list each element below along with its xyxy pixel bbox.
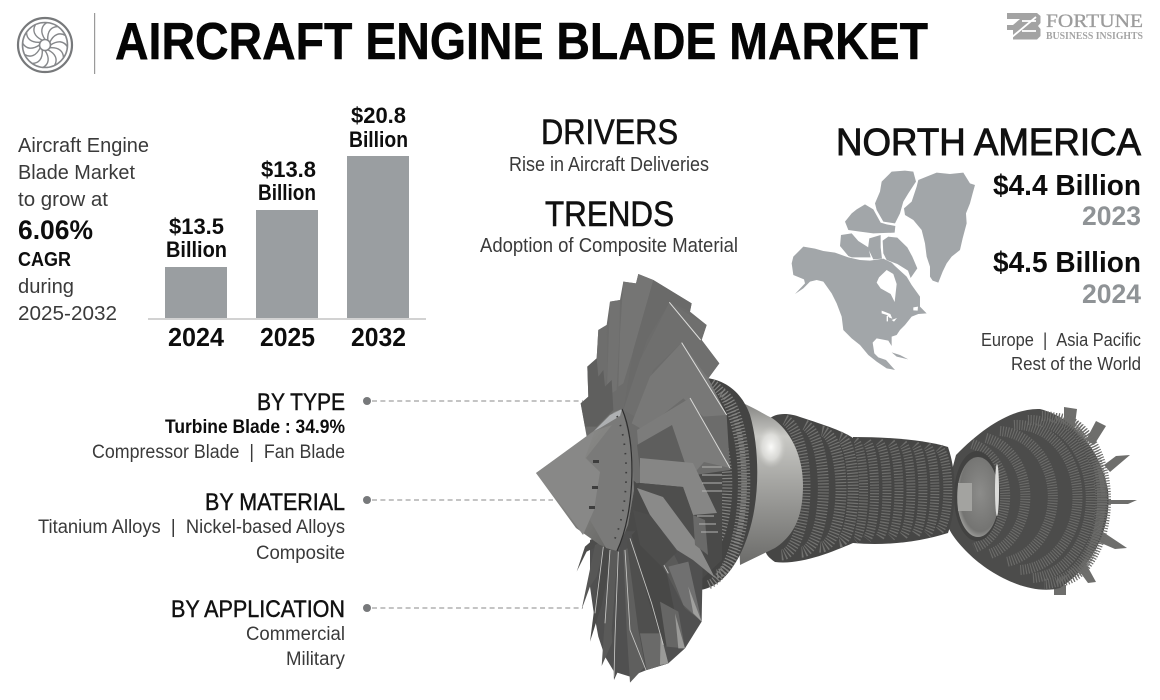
text: North America values: Europe | Asia Pacific (981, 330, 1141, 350)
text: North America values: NORTH AMERICA (836, 122, 1142, 164)
map: North America (792, 171, 975, 370)
text: drivers and trends (480, 113, 738, 257)
text: drivers and trends: Adoption of Composite Material (480, 235, 738, 257)
turbine section (946, 407, 1137, 595)
fan hub backing (620, 395, 722, 590)
bar chart: market size: Billion (349, 127, 408, 152)
bar chart: market size: 2025 (260, 324, 315, 352)
bar chart: market size: $20.8 (351, 103, 406, 128)
fan blades: upper (581, 274, 730, 483)
text: North America values (836, 122, 1142, 374)
text: by material (38, 489, 345, 564)
text: CAGR summary: to grow at (18, 189, 108, 211)
bar chart: market size: 2032 (351, 324, 406, 352)
text: CAGR summary (18, 135, 149, 325)
mid compressor (765, 414, 858, 562)
text: North America values: 2024 (1082, 279, 1141, 309)
fan blades: front (633, 398, 730, 578)
text: by material: Titanium Alloys | Nickel-based Alloys (38, 517, 345, 538)
text: by material: Composite (256, 543, 345, 564)
fan blades: lower (577, 530, 703, 683)
text: by application (171, 596, 345, 670)
bar chart: market size: Billion (166, 237, 227, 262)
logo: Fortune Business Insights (1007, 11, 1143, 42)
text: by type: BY TYPE (257, 389, 345, 416)
text: CAGR summary: during (18, 276, 74, 298)
text: North America values: $4.5 Billion (993, 247, 1141, 279)
logo: Fortune Business Insights: FORTUNE (1046, 11, 1143, 32)
illustration: turbofan engine (536, 274, 1137, 683)
text: North America values: $4.4 Billion (993, 170, 1141, 202)
callout: type connector (363, 397, 583, 405)
callout: material connector (363, 496, 553, 504)
text: by application: BY APPLICATION (171, 596, 345, 623)
text: by type: Compressor Blade | Fan Blade (92, 442, 345, 463)
low pressure compressor (684, 378, 757, 590)
text: CAGR summary: CAGR (18, 249, 71, 271)
text: drivers and trends: Rise in Aircraft Deliveries (509, 154, 709, 176)
silver cylinder (735, 400, 803, 565)
bar chart: market size (148, 103, 426, 352)
text: by application: Military (286, 649, 345, 670)
text: by application: Commercial (246, 624, 345, 645)
logo: Fortune Business Insights: BUSINESS INSIGHTS (1046, 31, 1143, 42)
text: by type (92, 389, 345, 463)
text: by material: BY MATERIAL (205, 489, 345, 516)
text: North America values: Rest of the World (1011, 354, 1141, 374)
text: CAGR summary: Aircraft Engine (18, 135, 149, 157)
bar chart: market size: 2024 (168, 324, 225, 352)
text: by type: Turbine Blade : 34.9% (165, 417, 345, 438)
text: North America values: 2023 (1082, 201, 1141, 231)
blade root rods (697, 467, 722, 532)
text: CAGR summary: 6.06% (18, 215, 93, 245)
title: AIRCRAFT ENGINE BLADE MARKET (115, 13, 928, 71)
turbine disc and shaft (954, 451, 1000, 541)
bar chart: market size: Billion (258, 180, 316, 205)
text: CAGR summary: Blade Market (18, 162, 135, 184)
icon: turbine fan (18, 18, 72, 72)
high pressure compressor (853, 437, 955, 544)
text: CAGR summary: 2025-2032 (18, 303, 117, 325)
text: drivers and trends: TRENDS (545, 195, 674, 234)
bar chart: market size: $13.5 (169, 214, 224, 239)
spinner cone (536, 409, 634, 551)
bar chart: market size: $13.8 (261, 157, 316, 182)
text: drivers and trends: DRIVERS (541, 113, 678, 152)
callout: application connector (363, 604, 583, 612)
